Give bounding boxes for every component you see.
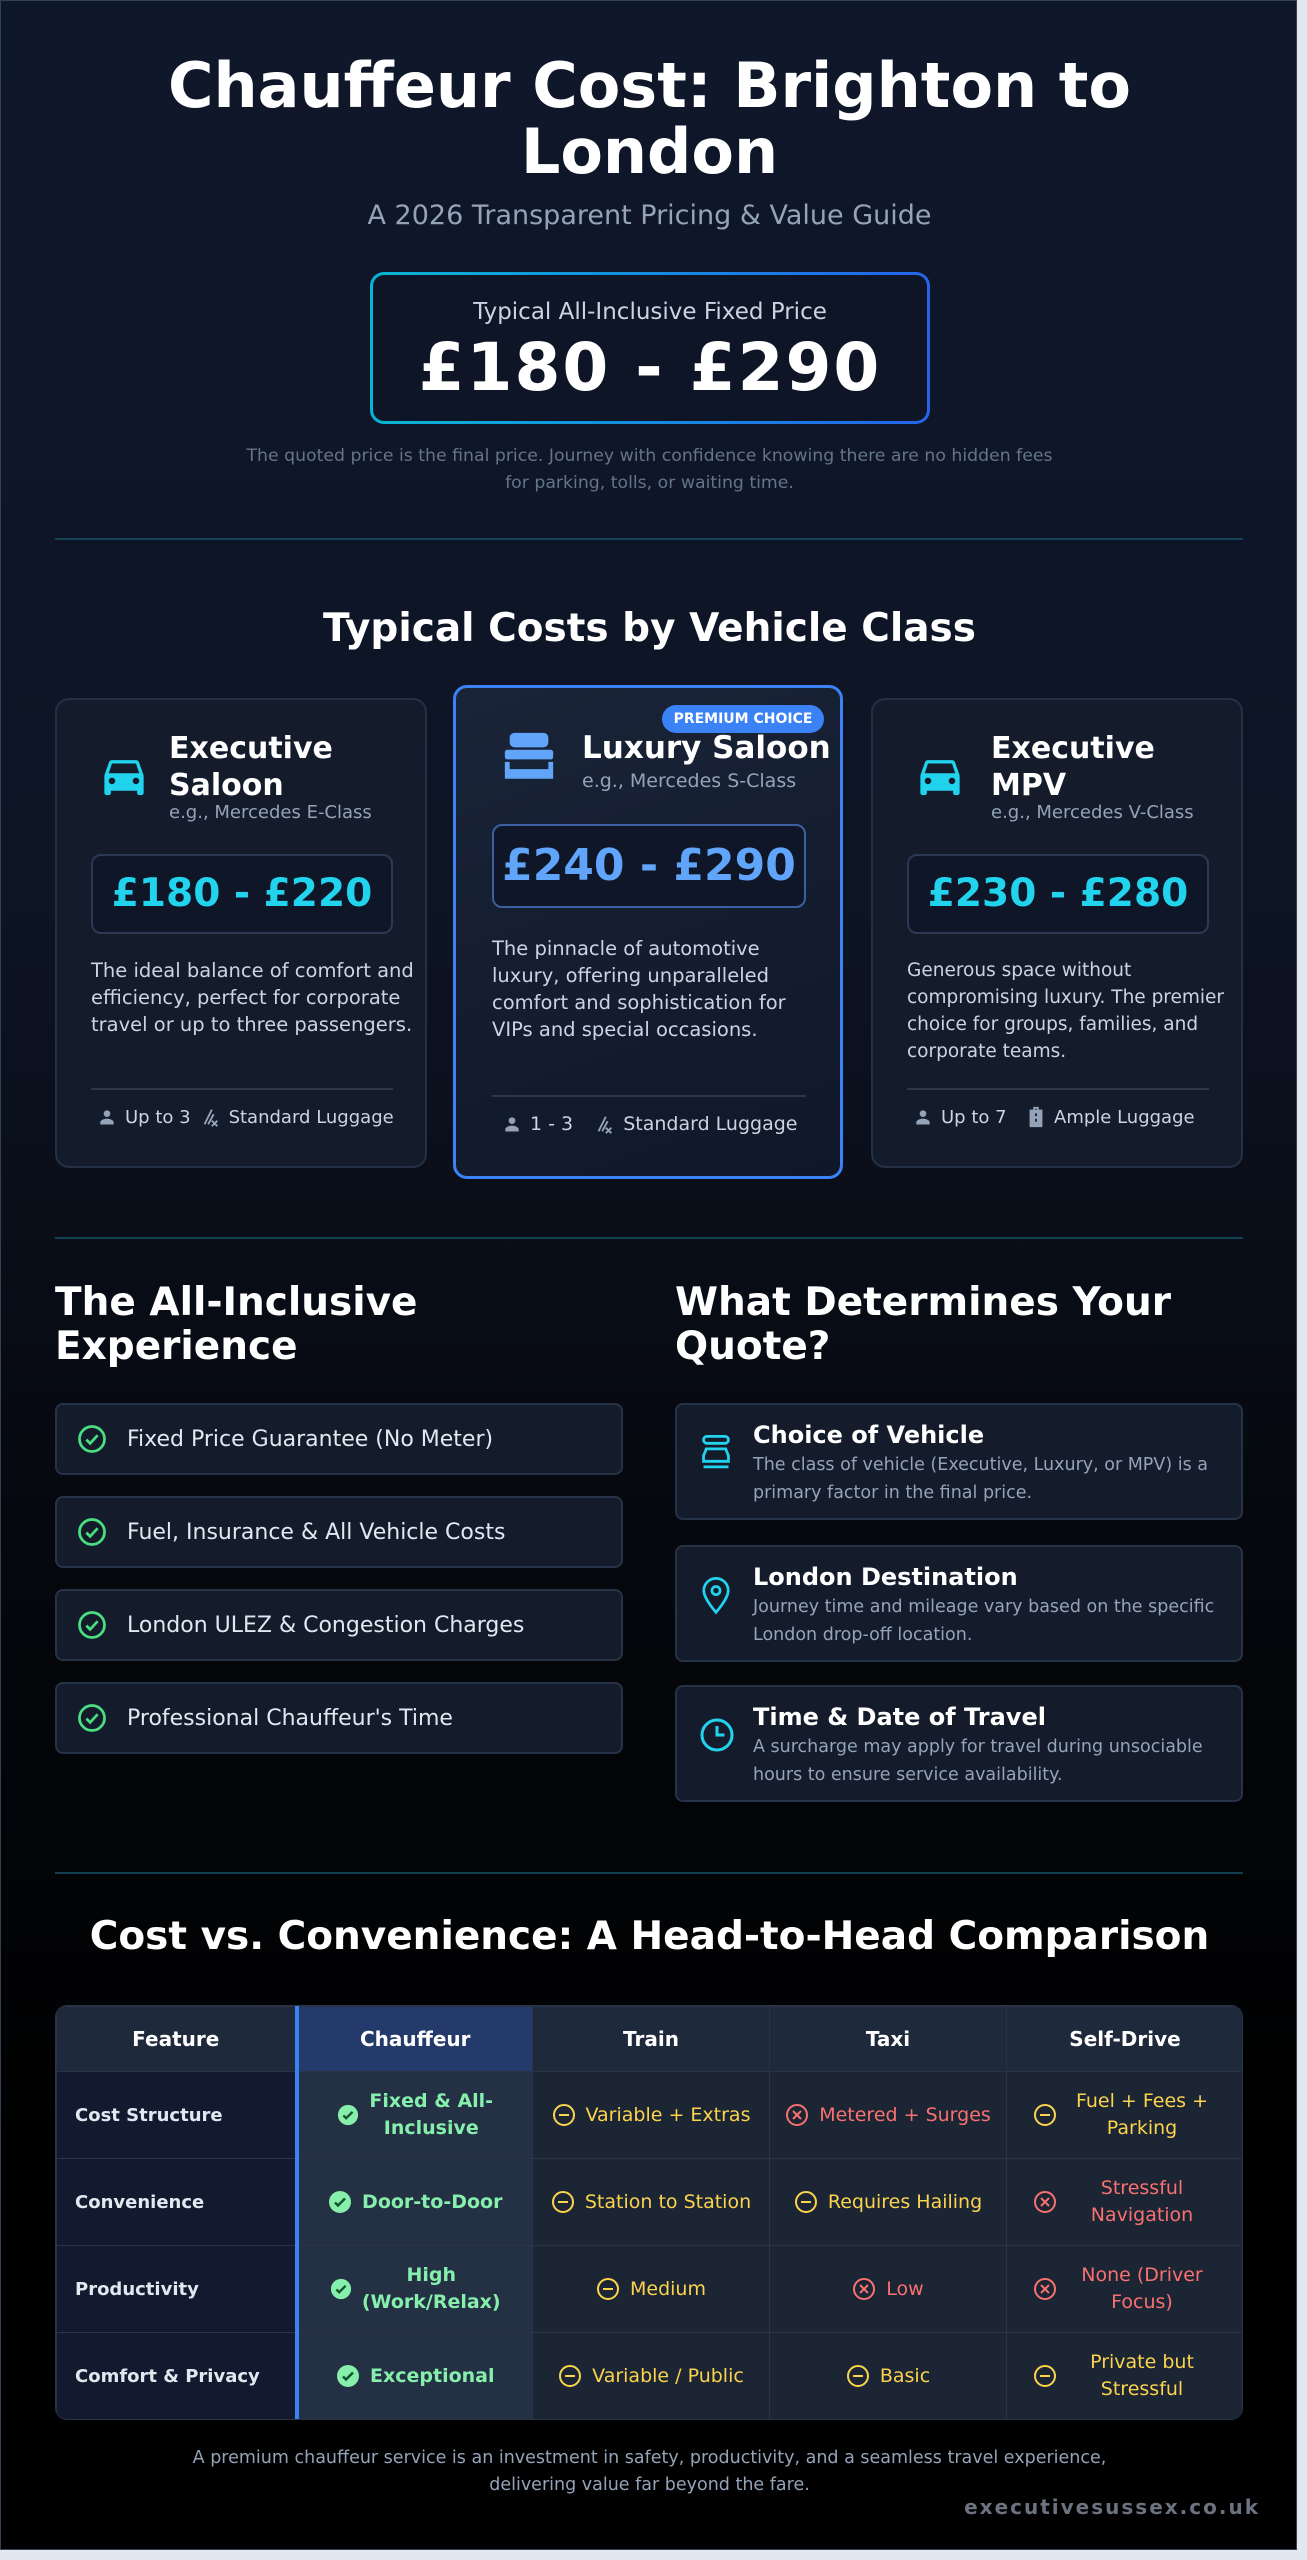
comparison table: Exceptional: [370, 2365, 494, 2387]
heading: quote factors: What Determines Your: [675, 1280, 1171, 1325]
factor: destination: Journey time and mileage vary based on the specific London drop-off location.: [753, 1597, 1214, 1645]
card title: MPV: [991, 768, 1066, 803]
comparison table: Comfort & Privacy: [75, 2366, 260, 2386]
description: The ideal balance of comfort and efficiency, perfect for corporate travel or up to three passengers.: [91, 959, 414, 1036]
closing text: [192, 2448, 1106, 2495]
description: Generous space without compromising luxury. The premier choice for groups, families, and corporate teams.: [907, 960, 1224, 1062]
heading: all-inclusive: [55, 1280, 417, 1369]
title: Chauffeur Cost: Brighton to: [168, 49, 1131, 122]
comparison table: (Work/Relax): [362, 2291, 501, 2313]
factor: time: A surcharge may apply for travel during unsociable hours to ensure service availability.: [753, 1737, 1203, 1785]
factor: time: Time & Date of Travel: [753, 1703, 1046, 1731]
comparison table: Convenience: [75, 2192, 204, 2212]
comparison table: Door-to-Door: [362, 2191, 502, 2213]
heading: all-inclusive: The All-Inclusive: [55, 1280, 417, 1325]
website: executivesussex.co.uk: [964, 2495, 1260, 2519]
card subtitle: e.g., Mercedes S-Class: [582, 770, 796, 792]
capacity footer: Up to 3 Standard Luggage: [125, 1106, 394, 1128]
card title: Saloon: [169, 768, 284, 803]
factor: vehicle: Choice of Vehicle: [753, 1421, 984, 1449]
included item 4: [55, 1682, 623, 1754]
price: £180 - £220: [112, 871, 372, 916]
heading: all-inclusive: Experience: [55, 1324, 298, 1369]
price: [907, 854, 1209, 934]
panel: executive saloon: [55, 698, 427, 1168]
badge: premium choice: [662, 705, 824, 733]
comparison table: Fuel + Fees + Parking: [1076, 2090, 1208, 2139]
factor: time: [675, 1685, 1243, 1802]
card title: Executive: [991, 731, 1155, 766]
comparison table: Low: [886, 2278, 924, 2300]
comparison table: Productivity: [75, 2278, 199, 2300]
icon: car: [104, 760, 144, 796]
included item 2: Fuel, Insurance & All Vehicle Costs: [127, 1520, 505, 1544]
price: [91, 854, 393, 934]
capacity footer: 1 - 3 Standard Luggage: [530, 1113, 798, 1135]
subtitle: A 2026 Transparent Pricing & Value Guide: [367, 200, 932, 231]
card title: Executive: [169, 731, 333, 766]
price label: Typical All-Inclusive Fixed Price: [473, 299, 827, 325]
included item 1: Fixed Price Guarantee (No Meter): [127, 1426, 493, 1452]
card title: [991, 731, 1155, 803]
factor: vehicle: [675, 1403, 1243, 1520]
included item 3: London ULEZ & Congestion Charges: [127, 1612, 524, 1638]
comparison table: Variable / Public: [592, 2365, 744, 2387]
panel: luxury saloon: [453, 685, 843, 1179]
included item 4: Professional Chauffeur's Time: [127, 1706, 453, 1730]
comparison table: Train: [623, 2027, 679, 2051]
included item 3: [55, 1589, 623, 1661]
description: The pinnacle of automotive luxury, offering unparalleled comfort and sophistication for VIPs and special occasions.: [492, 937, 786, 1041]
comparison table: [55, 2005, 1243, 2420]
heading: quote factors: Quote?: [675, 1324, 830, 1369]
comparison table: Self-Drive: [1069, 2027, 1181, 2051]
closing text: delivering value far beyond the fare.: [489, 2475, 810, 2495]
heading: quote factors: [675, 1280, 1171, 1369]
note text: for parking, tolls, or waiting time.: [505, 473, 794, 493]
card title: [169, 731, 333, 803]
closing text: A premium chauffeur service is an investment in safety, productivity, and a seamless travel experience,: [193, 2448, 1106, 2468]
hero price: £180 - £290: [419, 329, 881, 406]
included item 2: [55, 1496, 623, 1568]
price: £240 - £290: [502, 840, 796, 891]
note text: The quoted price is the final price. Journey with confidence knowing there are no hidden fees: [246, 446, 1053, 466]
comparison table: Feature: [132, 2027, 219, 2051]
heading: comparison: Cost vs. Convenience: A Head-to-Head Comparison: [90, 1914, 1209, 1959]
factor: destination: [675, 1545, 1243, 1662]
heading: vehicle classes: Typical Costs by Vehicle Class: [323, 606, 976, 651]
comparison table: Stressful Navigation: [1091, 2177, 1193, 2226]
comparison table: Cost Structure: [75, 2104, 223, 2126]
title: London: [521, 115, 778, 188]
comparison table: High: [406, 2264, 456, 2286]
included item 1: [55, 1403, 623, 1475]
comparison table: Station to Station: [585, 2191, 751, 2213]
comparison table: Variable + Extras: [586, 2104, 750, 2126]
card title: Luxury Saloon: [582, 730, 831, 766]
factor: destination: London Destination: [753, 1563, 1018, 1591]
factor: vehicle: The class of vehicle (Executive, Luxury, or MPV) is a primary factor in the final price.: [753, 1455, 1208, 1503]
comparison table: None (Driver Focus): [1081, 2264, 1203, 2313]
note text: [246, 446, 1053, 493]
panel: executive mpv: [871, 698, 1243, 1168]
comparison table: Taxi: [866, 2027, 910, 2051]
comparison table: Inclusive: [384, 2117, 479, 2139]
title: [168, 49, 1131, 188]
comparison table: Fixed & All-: [369, 2090, 493, 2112]
capacity footer: Up to 7 Ample Luggage: [941, 1106, 1195, 1128]
comparison table: Medium: [630, 2278, 706, 2300]
icon: luxury car: [504, 732, 554, 779]
price: £230 - £280: [928, 871, 1188, 916]
badge: premium choice: PREMIUM CHOICE: [674, 711, 812, 727]
price: [492, 824, 806, 908]
card subtitle: e.g., Mercedes E-Class: [169, 802, 372, 823]
comparison table: Private but Stressful: [1090, 2351, 1194, 2400]
hero price box: [370, 272, 930, 424]
comparison table: Requires Hailing: [828, 2191, 982, 2213]
icon: mpv: [920, 760, 960, 796]
comparison table: Chauffeur: [360, 2027, 471, 2051]
comparison table: Basic: [880, 2365, 930, 2387]
comparison table: Metered + Surges: [819, 2104, 991, 2126]
card subtitle: e.g., Mercedes V-Class: [991, 802, 1194, 823]
